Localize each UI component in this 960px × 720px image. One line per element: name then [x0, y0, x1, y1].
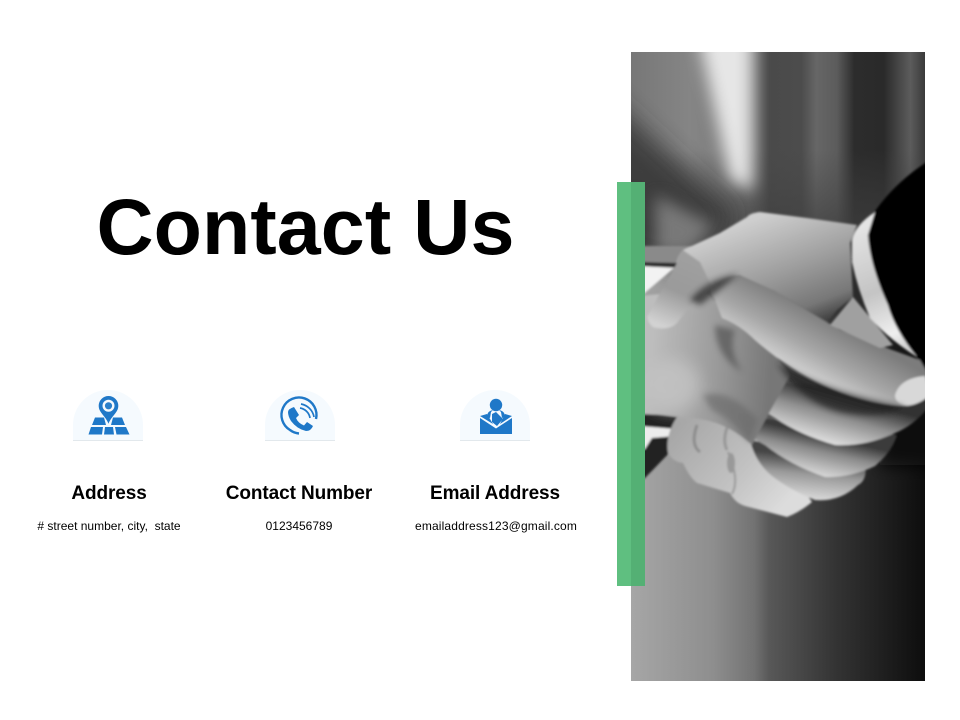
finger three: [735, 415, 897, 477]
heading: email address: Email Address: [430, 483, 560, 504]
lower-left cuff: [640, 412, 682, 480]
heading: address: Address: [71, 483, 147, 504]
wrist under cuff: [830, 297, 893, 348]
finger two: [745, 380, 930, 445]
jacket sleeve: [868, 160, 930, 375]
fist finger creases: [694, 425, 735, 494]
photo: handshake: [631, 52, 925, 681]
fist fingers below: [667, 410, 812, 517]
shadow between fingers: [777, 362, 905, 415]
thumb: [647, 250, 712, 328]
title: Contact Us: [96, 182, 514, 271]
text: contact number: 0123456789: [266, 519, 332, 533]
text: address: # street number, city, state: [37, 519, 181, 533]
text: email address: emailaddress123@gmail.com: [415, 519, 577, 533]
left band behind hands: [640, 246, 692, 264]
green vertical bar: [617, 182, 645, 586]
icon: email: [460, 390, 530, 441]
finger four: [750, 440, 866, 500]
left cuff upper: [640, 266, 674, 297]
bar overlap on photo: [631, 182, 645, 586]
fingernail: [895, 376, 930, 405]
palm and knuckles: [640, 290, 790, 445]
thumb crease: [690, 274, 738, 305]
back of upper hand: [677, 212, 857, 322]
background folds: [600, 20, 960, 698]
icon: map pin: [73, 390, 143, 441]
heading: contact number: Contact Number: [226, 483, 372, 504]
shirt cuff: [852, 212, 917, 357]
icon: phone: [265, 390, 335, 441]
index finger: [710, 275, 930, 406]
